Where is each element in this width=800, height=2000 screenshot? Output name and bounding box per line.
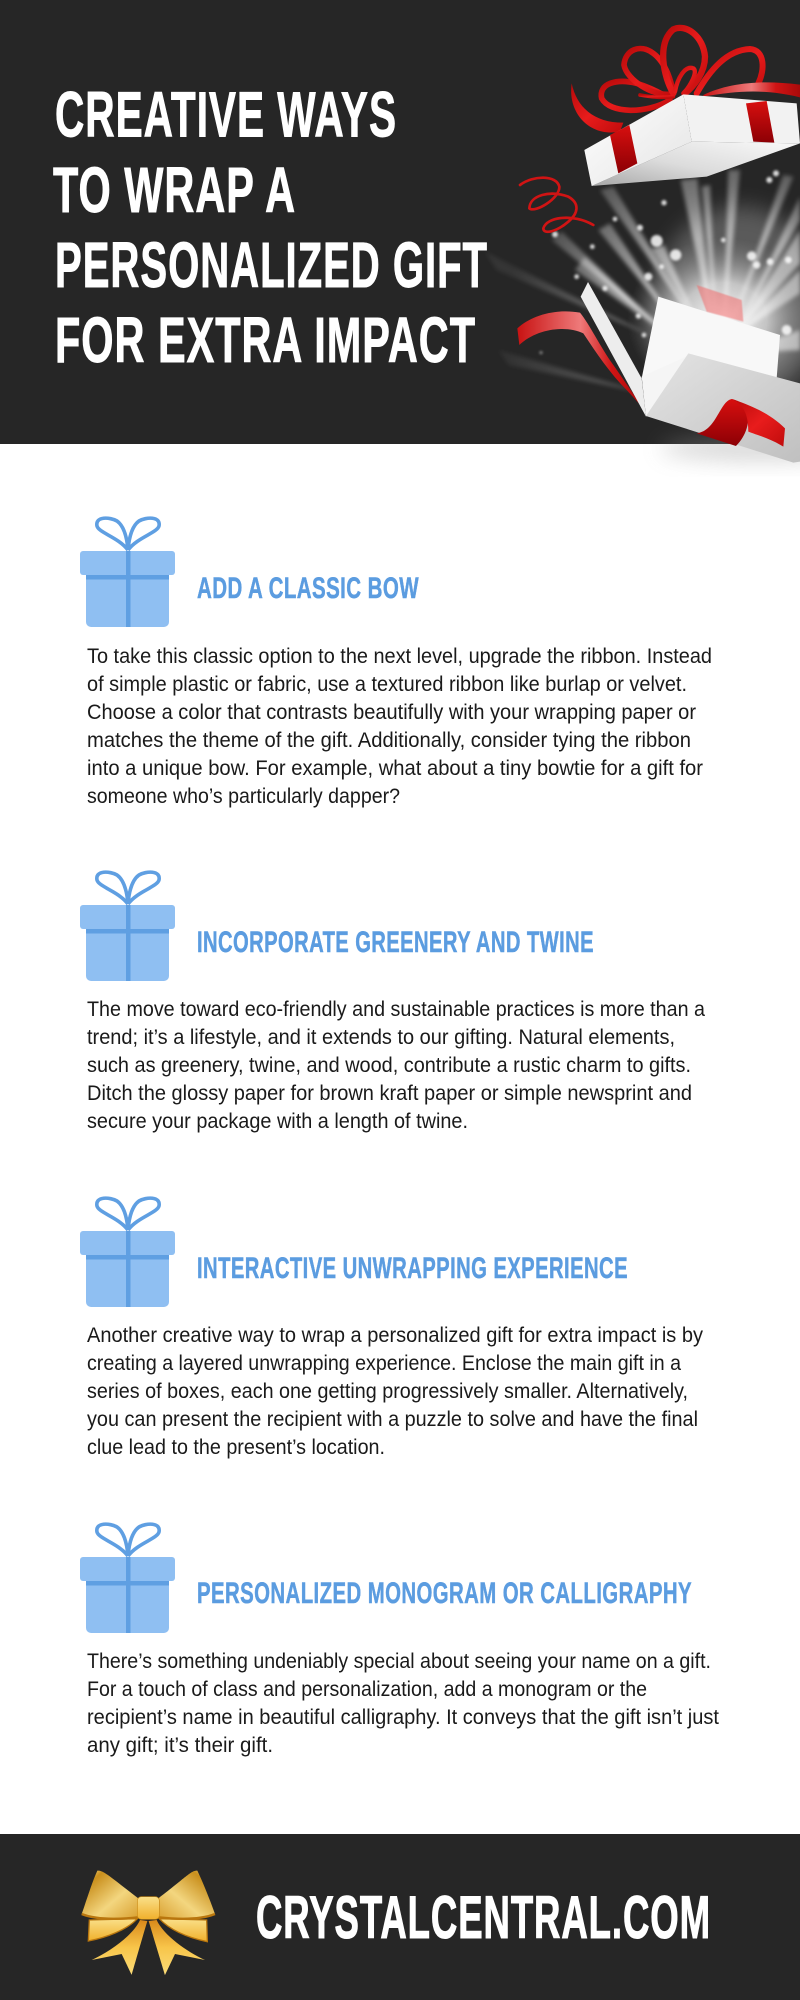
curled ribbon [520,178,593,232]
body text: series of boxes, each one getting progressively smaller. Alternatively, [87,1380,688,1403]
title [53,78,488,376]
body text: trend; it’s a lifestyle, and it extends to our gifting. Natural elements, [87,1026,675,1049]
icon: gift box [80,1524,175,1633]
body text [87,1324,703,1459]
body text: matches the theme of the gift. Additionally, consider tying the ribbon [87,729,691,752]
section: incorporate greenery and twine [80,872,705,1133]
icon: gift box [80,518,175,627]
body text [87,645,712,808]
body text: someone who’s particularly dapper? [87,785,400,808]
body text: of simple plastic or fabric, use a textured ribbon like burlap or velvet. [87,673,687,696]
top right wing [158,1871,215,1918]
wing rims [82,1914,215,1919]
body text [87,1650,719,1757]
top left wing [82,1871,138,1918]
body text: secure your package with a length of twine. [87,1110,468,1133]
box inner corner [642,353,693,417]
heading: ADD A CLASSIC BOW [197,572,419,605]
box front panel [646,353,800,463]
ribbon fold on box [697,399,785,447]
header background [0,0,800,444]
body text: into a unique bow. For example, what about a tiny bowtie for a gift for [87,757,703,780]
left ribbon [517,311,643,408]
body text: any gift; it’s their gift. [87,1734,273,1757]
icon: gift box [80,1198,175,1307]
body text: For a touch of class and personalization, add a monogram or the [87,1678,647,1701]
bow right tail [703,82,800,97]
body text: clue lead to the present’s location. [87,1436,385,1459]
box shadow on white [660,436,800,461]
gift lid bow [571,28,763,132]
body text: creating a layered unwrapping experience. Enclose the main gift in a [87,1352,681,1375]
body text: There’s something undeniably special about seeing your name on a gift. [87,1650,711,1673]
title: PERSONALIZED GIFT [55,229,488,301]
body text: To take this classic option to the next level, upgrade the ribbon. Instead [87,645,712,668]
icon: gift box [80,872,175,981]
body text: Another creative way to wrap a personalized gift for extra impact is by [87,1324,703,1347]
title: CREATIVE WAYS [55,78,397,150]
title: TO WRAP A [53,154,296,226]
illustration: exploding gift box [485,28,800,463]
panel: header [0,0,800,463]
red reflection [697,285,743,322]
knot [137,1897,159,1919]
light rays [485,170,800,393]
lower left wing [88,1919,137,1941]
body text: recipient’s name in beautiful calligraphy. It conveys that the gift isn’t just [87,1706,719,1729]
section: add a classic bow [80,518,712,808]
body text: Choose a color that contrasts beautifully with your wrapping paper or [87,701,696,724]
section: personalized monogram or calligraphy [80,1524,719,1757]
sparkles [539,170,792,354]
lower right wing [159,1919,207,1942]
heading: INCORPORATE GREENERY AND TWINE [197,926,594,959]
panel: footer [0,1834,800,2000]
icon: golden bow [82,1871,215,1975]
body text: The move toward eco-friendly and sustainable practices is more than a [87,998,705,1021]
box back panel [642,297,780,378]
body text: Ditch the glossy paper for brown kraft paper or simple newsprint and [87,1082,692,1105]
footer background [0,1834,800,2000]
body text [87,998,705,1133]
grey halo behind rays [653,207,800,407]
right tail [149,1920,205,1975]
box left flap [581,282,646,417]
left tail [92,1920,147,1975]
central glow [627,237,800,403]
title: FOR EXTRA IMPACT [55,304,476,376]
section: interactive unwrapping experience [80,1198,703,1459]
body text: such as greenery, twine, and wood, contribute a rustic charm to gifts. [87,1054,691,1077]
gift lid [584,94,800,186]
body text: you can present the recipient with a puzzle to solve and have the final [87,1408,698,1431]
